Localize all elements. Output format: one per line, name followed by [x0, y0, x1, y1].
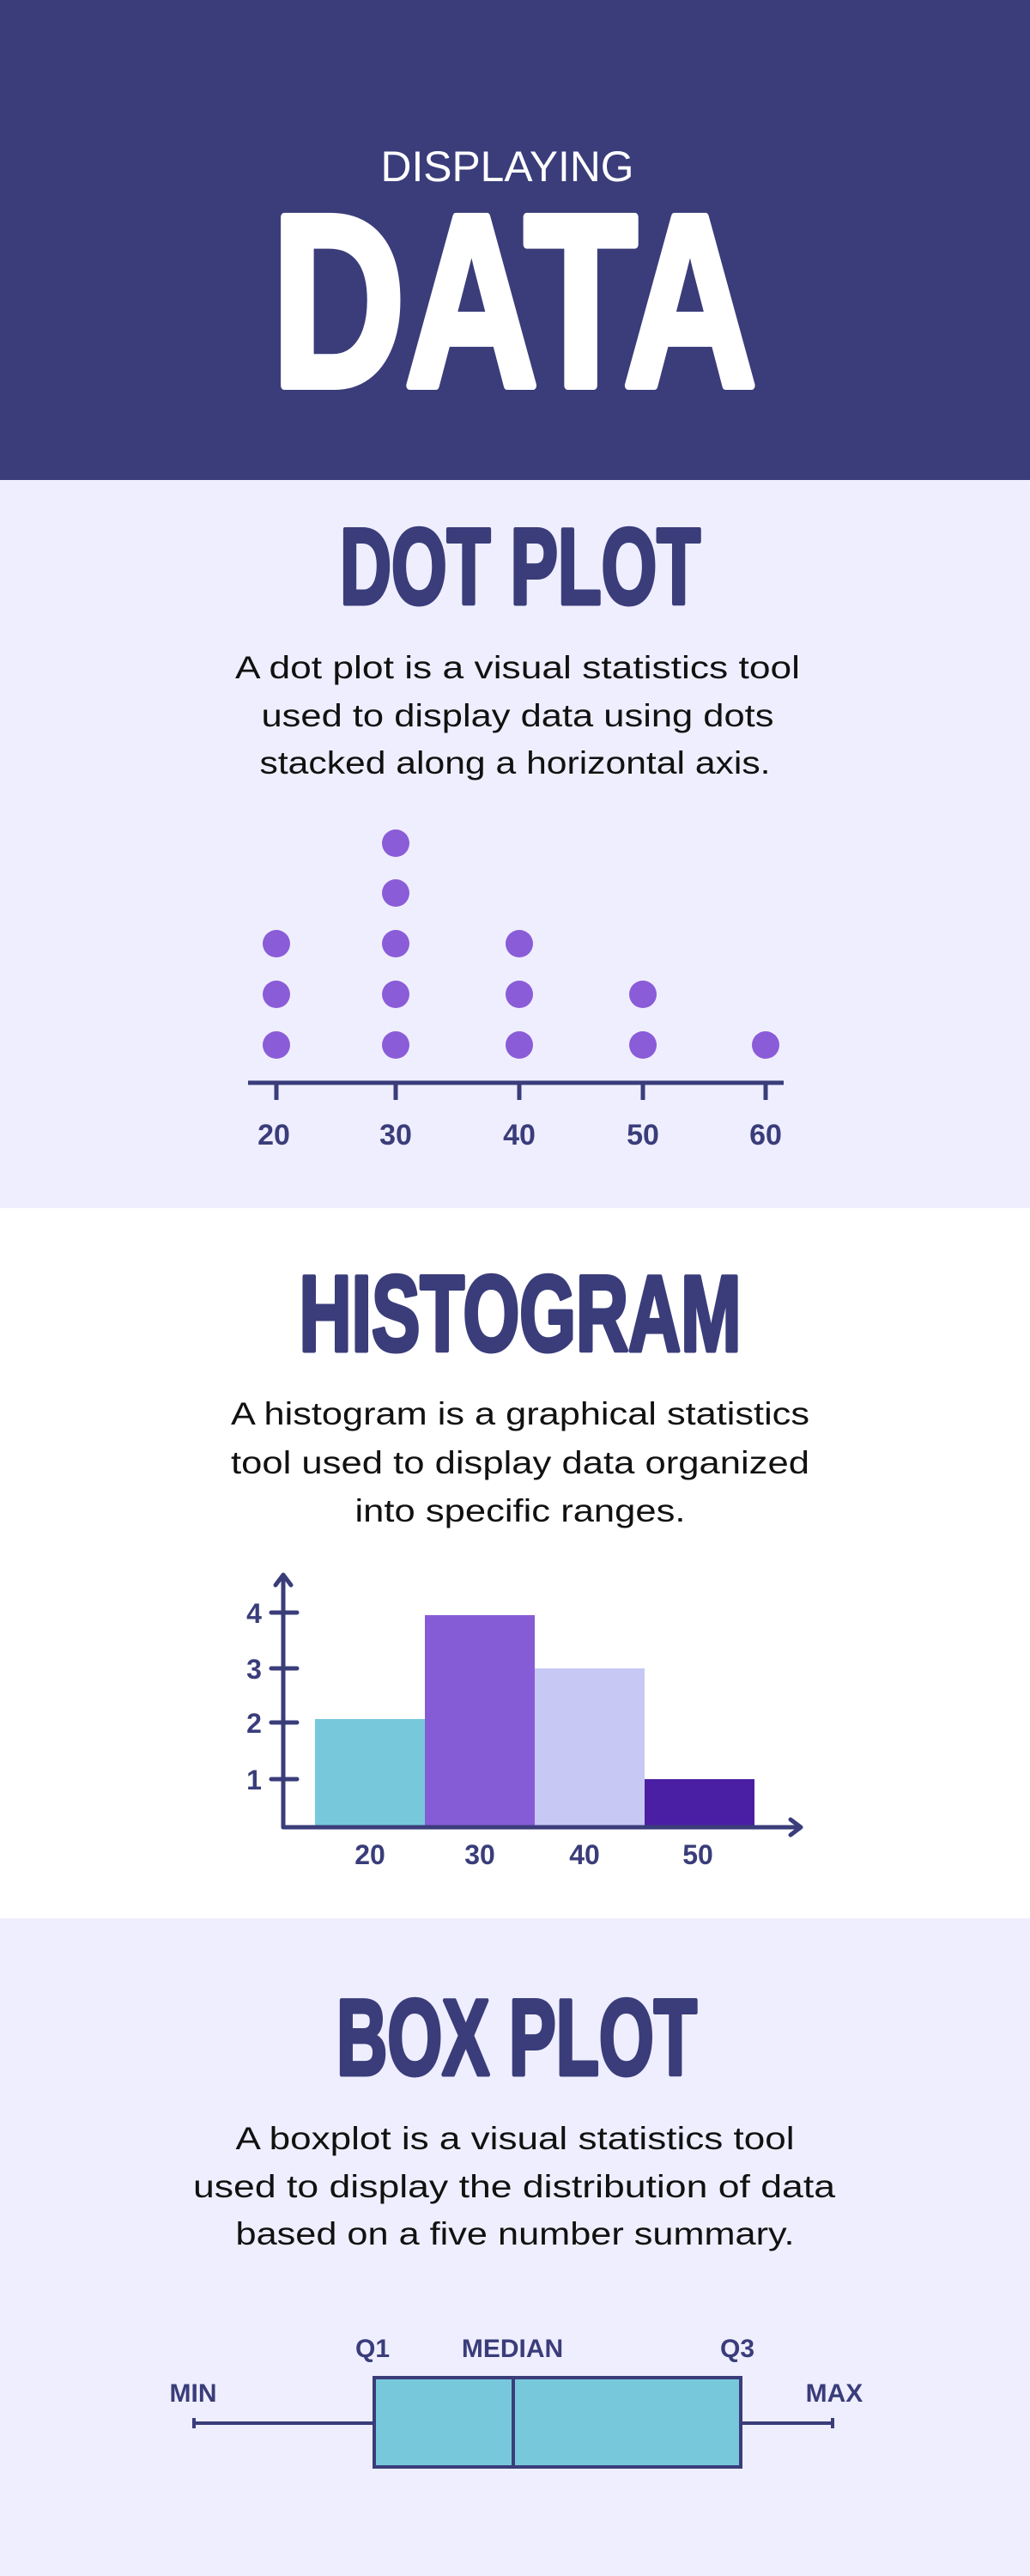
- chart: histogram: [246, 1575, 801, 1870]
- chart: box plot: MAX: [806, 2379, 863, 2408]
- heading: box plot: BOX PLOT: [336, 1978, 697, 2098]
- chart: dot plot: 50: [627, 1119, 659, 1151]
- chart: histogram: 4: [246, 1598, 262, 1629]
- chart: histogram: 20: [354, 1839, 385, 1870]
- header panel: [0, 0, 1030, 480]
- text: dot plot description: [235, 650, 800, 781]
- text: dot plot description: A dot plot is a visual statistics tool: [235, 650, 800, 685]
- chart: histogram: 50: [682, 1839, 713, 1870]
- text: histogram description: tool used to display data organized: [231, 1445, 809, 1480]
- text: histogram description: into specific ranges.: [355, 1493, 685, 1528]
- text: dot plot description: used to display data using dots: [261, 698, 774, 733]
- chart: histogram: 30: [464, 1839, 495, 1870]
- chart: box plot: [170, 2335, 863, 2467]
- heading: dot plot: DOT PLOT: [340, 507, 700, 627]
- text: box plot description: A boxplot is a visual statistics tool: [235, 2121, 795, 2156]
- text: box plot description: based on a five number summary.: [235, 2216, 795, 2251]
- title: data: DATA: [271, 165, 757, 438]
- text: box plot description: used to display the distribution of data: [193, 2169, 835, 2204]
- text: box plot description: [193, 2121, 835, 2251]
- panel: dot plot: [0, 480, 1030, 1208]
- heading: histogram: HISTOGRAM: [299, 1255, 742, 1374]
- chart: dot plot: 40: [503, 1119, 536, 1151]
- panel: box plot: [0, 1918, 1030, 2576]
- chart: dot plot: 30: [379, 1119, 412, 1151]
- chart: histogram: 1: [246, 1765, 262, 1795]
- chart: box plot: MIN: [170, 2379, 216, 2408]
- chart: histogram: 3: [246, 1654, 262, 1685]
- text: histogram description: [231, 1396, 809, 1528]
- text: dot plot description: stacked along a horizontal axis.: [259, 745, 771, 781]
- text: histogram description: A histogram is a graphical statistics: [231, 1396, 809, 1431]
- chart: dot plot: 20: [258, 1119, 290, 1151]
- panel: histogram: [0, 1208, 1030, 1918]
- chart: histogram: 40: [569, 1839, 600, 1870]
- chart: dot plot: 60: [749, 1119, 782, 1151]
- chart: box plot: Q3: [720, 2335, 754, 2363]
- subtitle: displaying: DISPLAYING: [381, 143, 633, 191]
- chart: box plot: Q1: [355, 2335, 390, 2363]
- chart: box plot: MEDIAN: [462, 2335, 563, 2363]
- chart: histogram: 2: [246, 1708, 262, 1739]
- chart: dot plot: [248, 829, 784, 1151]
